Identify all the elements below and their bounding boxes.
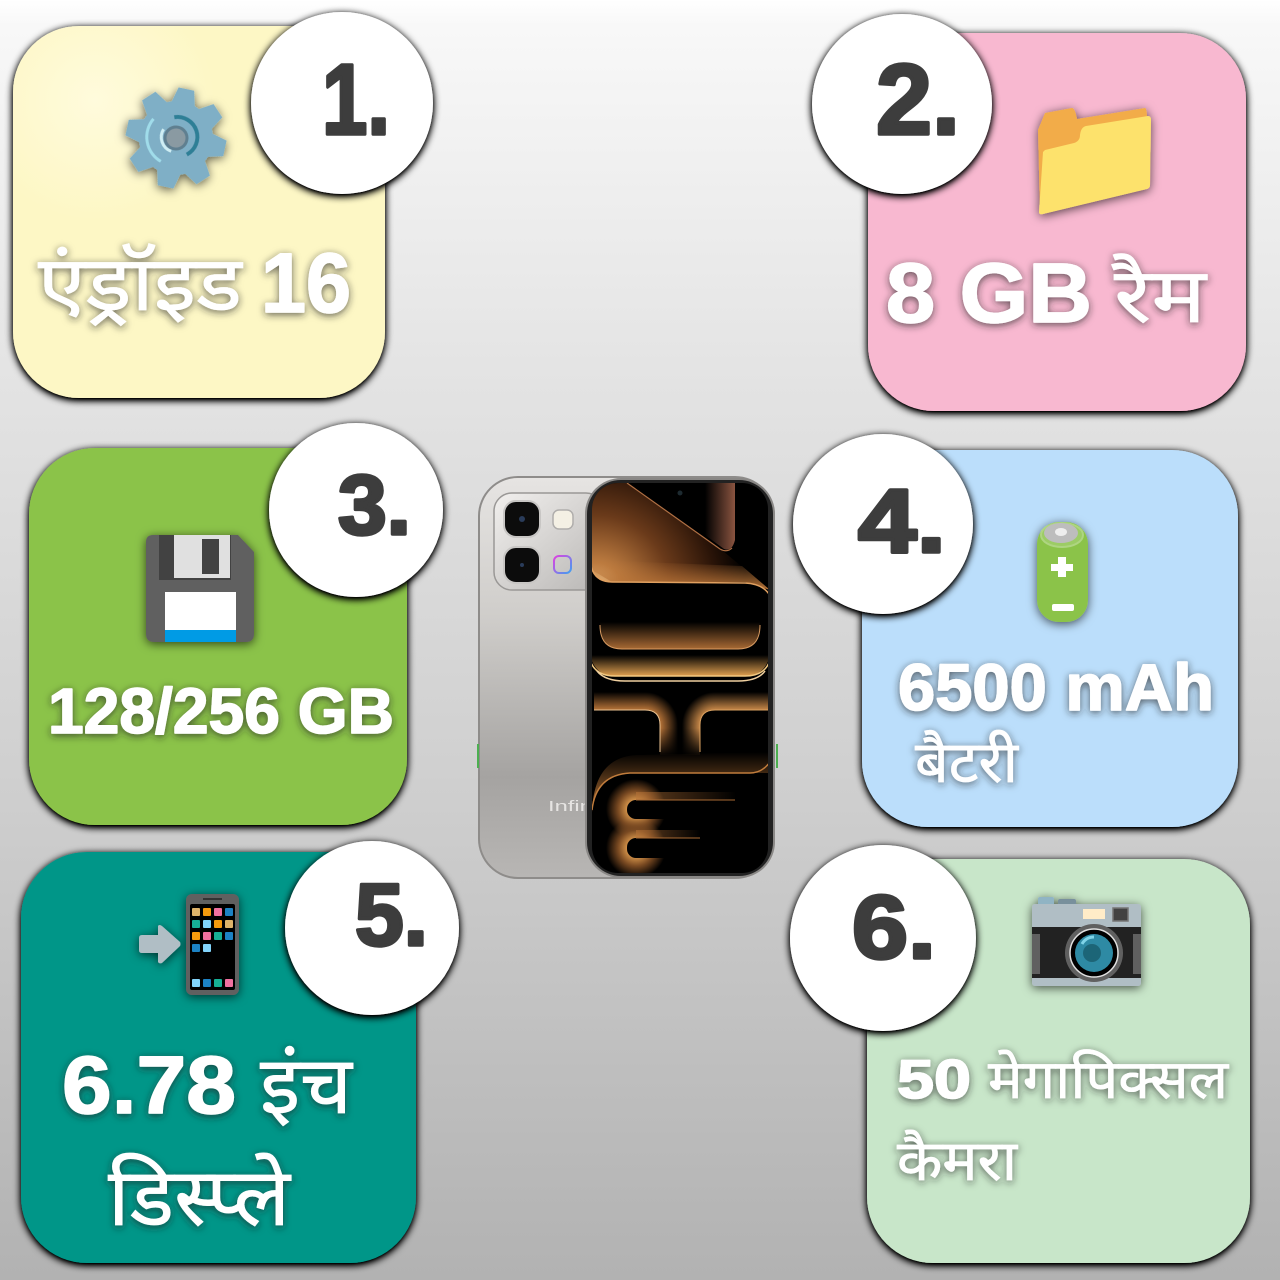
badge 1: 1.	[322, 44, 390, 156]
phone front screen	[585, 478, 775, 878]
icon: battery	[1037, 522, 1088, 622]
label: 6500 mAh battery: बैटरी	[915, 730, 1019, 795]
badge 2: 2.	[876, 44, 960, 156]
panel 4: battery	[862, 450, 1238, 827]
screen art: second band	[600, 622, 760, 649]
icon: folder	[1038, 108, 1151, 214]
icon: floppy disk	[146, 535, 254, 642]
label: Android 16: एंड्रॉइड	[38, 242, 244, 327]
label: 6500 mAh battery	[898, 650, 1214, 795]
label: 50 megapixel camera: 50	[897, 1048, 971, 1110]
label: 128/256 GB: 128/256 GB	[48, 675, 394, 747]
badge 6	[790, 845, 976, 1031]
badge 3	[269, 423, 443, 597]
badge 5: 5.	[355, 865, 428, 964]
label: 8 GB RAM: रैम	[1111, 253, 1208, 339]
label: Android 16	[38, 236, 351, 330]
badge 5	[285, 841, 459, 1015]
screen art: top glow	[592, 483, 738, 582]
panel 2: 8 GB RAM	[868, 33, 1246, 411]
label: 6.78 inch display	[62, 1040, 353, 1242]
screen art: right stem	[715, 692, 770, 710]
badge 4: 4.	[858, 472, 946, 572]
panel 3: storage	[29, 448, 407, 825]
label: 6500 mAh battery: 6500 mAh	[898, 650, 1214, 724]
screen art: left stem	[594, 692, 645, 710]
panel 1: Android 16	[13, 26, 385, 398]
label: 8 GB RAM	[886, 246, 1208, 340]
label: 50 megapixel camera	[897, 1048, 1229, 1192]
label: 8 GB RAM: 8 GB	[886, 246, 1092, 340]
badge 6: 6.	[852, 878, 936, 978]
label: 6.78 inch display: इंच	[260, 1041, 353, 1130]
screen art: lower shape	[592, 752, 770, 812]
label: 50 megapixel camera: मेगापिक्सल	[988, 1049, 1229, 1110]
badge 3: 3.	[338, 458, 411, 552]
panel 6: camera	[867, 859, 1250, 1263]
phone image	[477, 476, 778, 879]
phone back: Infinix	[548, 798, 611, 815]
badge 4	[793, 434, 973, 614]
phone back	[477, 476, 778, 879]
icon: camera	[1032, 897, 1141, 986]
icon: gear	[117, 79, 235, 197]
badge 1	[251, 12, 433, 194]
badge 2	[812, 14, 992, 194]
label: 50 megapixel camera: कैमरा	[897, 1129, 1019, 1192]
label: 6.78 inch display: डिस्प्ले	[108, 1152, 292, 1242]
label: 6.78 inch display: 6.78	[62, 1040, 236, 1131]
panel 5: display	[21, 852, 416, 1263]
icon: mobile phone with arrow	[139, 894, 239, 995]
screen art: third band	[590, 655, 770, 676]
label: Android 16: 16	[261, 236, 351, 330]
